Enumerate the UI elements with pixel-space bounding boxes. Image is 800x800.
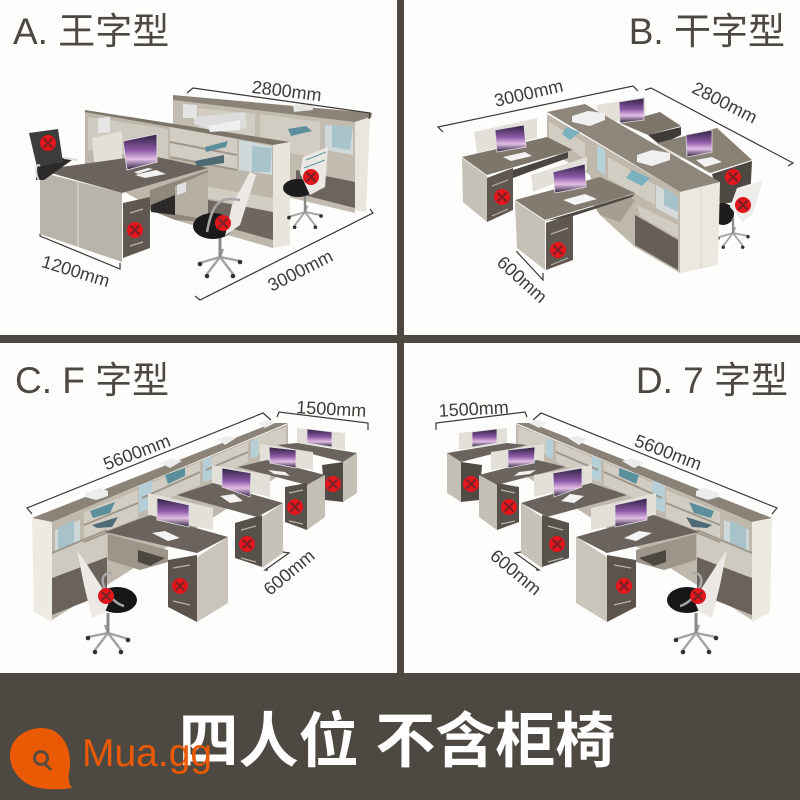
dimension: 1200mm bbox=[39, 234, 120, 291]
dimension: 1500mm bbox=[436, 397, 527, 430]
watermark: Mua.gg: Mua.gg bbox=[82, 732, 212, 775]
dimension: 5600mm: 5600mm bbox=[632, 431, 704, 474]
dimension: 5600mm: 5600mm bbox=[101, 431, 173, 474]
banner text: 四人位 不含柜椅 bbox=[179, 708, 615, 775]
dimension: 3000mm: 3000mm bbox=[265, 246, 336, 295]
dimension: 2800mm bbox=[645, 78, 793, 166]
dimension: 5600mm bbox=[27, 413, 271, 514]
furniture: A layout bbox=[29, 95, 372, 278]
desk 4 bbox=[277, 428, 357, 502]
chair: back left bbox=[29, 129, 78, 180]
desk 3 bbox=[238, 444, 325, 530]
dimension: 3000mm: 3000mm bbox=[492, 76, 565, 111]
front desk bbox=[515, 157, 635, 270]
dimension: 600mm: 600mm bbox=[260, 545, 319, 599]
panel: B 干字型 bbox=[404, 0, 800, 335]
dimension: 600mm: 600mm bbox=[493, 252, 551, 307]
watermark: Mua.gg bbox=[10, 728, 212, 789]
dimension: 3000mm bbox=[195, 209, 373, 300]
dimension: 2800mm: 2800mm bbox=[251, 77, 323, 105]
furniture: C layout bbox=[32, 420, 357, 654]
heading: B: B. 干字型 bbox=[629, 11, 785, 52]
furniture: B layout bbox=[462, 97, 763, 273]
chair: centre bbox=[193, 172, 256, 278]
heading: C: C. F 字型 bbox=[15, 360, 169, 401]
chair: rear bbox=[283, 147, 328, 229]
chair: right bbox=[712, 180, 763, 249]
left desk bbox=[462, 118, 573, 222]
furniture: D layout bbox=[447, 420, 772, 654]
dimension: 1500mm: 1500mm bbox=[296, 397, 367, 421]
dimension: 5600mm bbox=[533, 413, 777, 514]
desk 2 bbox=[177, 465, 283, 568]
dimension: 3000mm bbox=[438, 76, 638, 132]
dimension: 2800mm bbox=[187, 77, 370, 119]
dimension: 1500mm bbox=[277, 397, 368, 430]
dimension: 2800mm: 2800mm bbox=[689, 78, 760, 127]
heading: D: D. 7 字型 bbox=[636, 360, 788, 401]
dimension: 600mm: 600mm bbox=[486, 545, 545, 599]
desk 1 bbox=[105, 493, 228, 622]
chair bbox=[77, 550, 137, 654]
panel: C F字型 bbox=[0, 343, 397, 673]
dimension: 1200mm: 1200mm bbox=[39, 251, 112, 291]
desk panel and monitor bbox=[92, 131, 122, 172]
heading: A: A. 王字型 bbox=[13, 11, 169, 52]
panel: D 7字型 bbox=[404, 343, 800, 673]
panel: A 王字型 bbox=[0, 0, 397, 335]
dimension: 1500mm: 1500mm bbox=[438, 397, 509, 421]
icon: search bubble bbox=[10, 728, 72, 789]
